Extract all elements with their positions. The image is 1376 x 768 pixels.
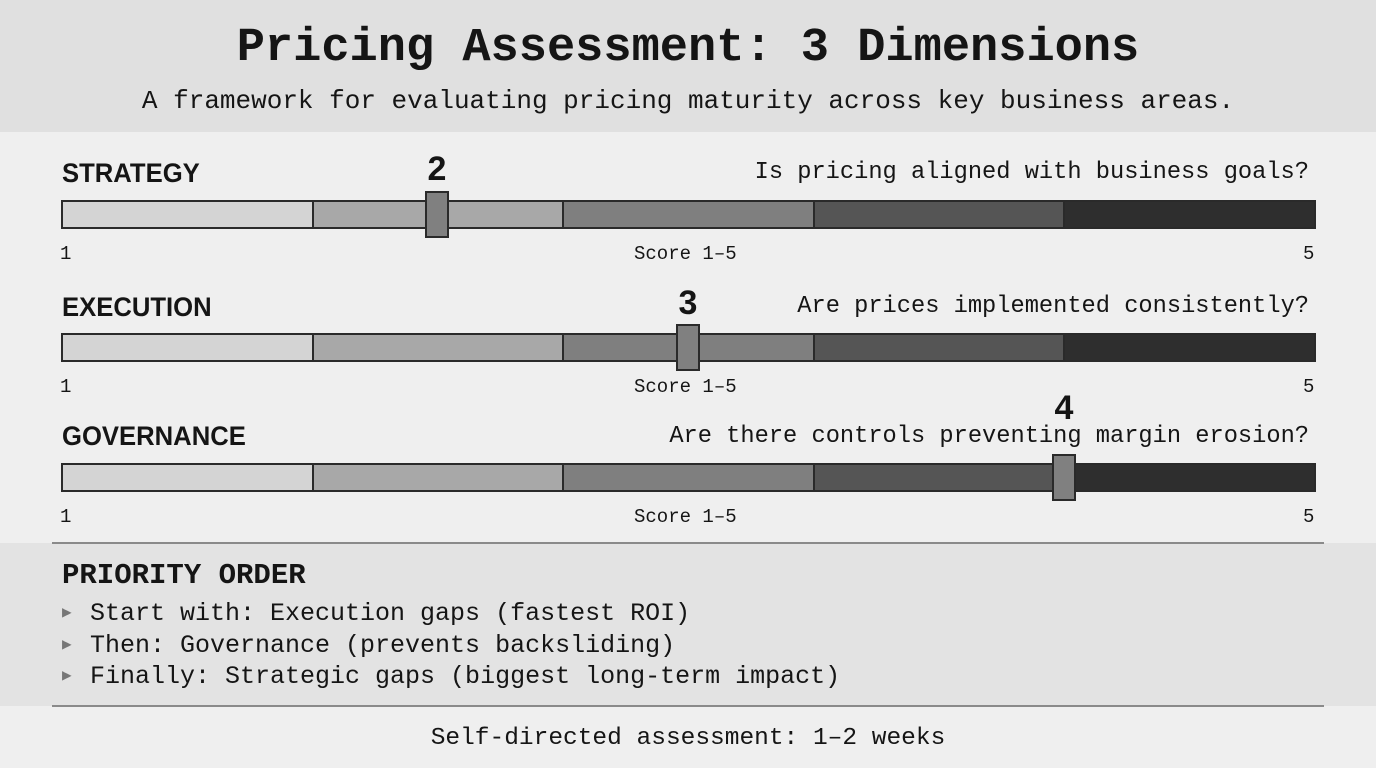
question: execution: Are prices implemented consistently? — [797, 293, 1309, 320]
axis labels: 5 — [1303, 243, 1314, 265]
footer note: Self-directed assessment: 1–2 weeks — [431, 725, 945, 752]
axis labels: 1 — [60, 376, 71, 398]
panel: governance — [60, 389, 1316, 528]
axis labels: Score 1–5 — [634, 243, 737, 265]
question: strategy: Is pricing aligned with business goals? — [755, 159, 1309, 186]
score number 2: 2 — [428, 150, 446, 188]
axis labels — [60, 243, 1314, 265]
score bar — [61, 200, 1316, 229]
axis labels: 5 — [1303, 506, 1314, 528]
header band — [0, 0, 1376, 132]
label: execution: EXECUTION — [62, 292, 212, 322]
marker 4 — [1052, 454, 1076, 501]
axis labels: Score 1–5 — [634, 506, 737, 528]
priority item 2: Then: Governance (prevents backsliding) — [90, 631, 675, 660]
question: governance: Are there controls preventing margin erosion? — [669, 423, 1309, 450]
axis labels: Score 1–5 — [634, 376, 737, 398]
axis labels: 1 — [60, 243, 71, 265]
priority heading: PRIORITY ORDER — [62, 559, 306, 592]
subtitle: A framework for evaluating pricing maturity across key business areas. — [142, 86, 1234, 116]
label: governance: GOVERNANCE — [62, 421, 246, 451]
score bar — [61, 333, 1316, 362]
label: strategy: STRATEGY — [62, 158, 200, 188]
score number 3: 3 — [679, 284, 697, 322]
axis labels — [60, 506, 1314, 528]
title: Pricing Assessment: 3 Dimensions — [237, 22, 1139, 75]
axis labels: 5 — [1303, 376, 1314, 398]
score number 4: 4 — [1055, 389, 1073, 427]
priority item 1: ▶ — [62, 604, 72, 622]
priority item 2: ▶ — [62, 636, 72, 654]
panel: execution — [60, 284, 1316, 398]
priority item 3: ▶ — [62, 667, 72, 685]
marker 2 — [425, 191, 449, 238]
score bar — [61, 463, 1316, 492]
panel: strategy — [60, 150, 1316, 265]
axis labels: 1 — [60, 506, 71, 528]
panel: priority order — [0, 543, 1376, 706]
priority item 3: Finally: Strategic gaps (biggest long-term impact) — [90, 662, 840, 691]
axis labels — [60, 376, 1314, 398]
priority item 1: Start with: Execution gaps (fastest ROI) — [90, 599, 690, 628]
marker 3 — [676, 324, 700, 371]
